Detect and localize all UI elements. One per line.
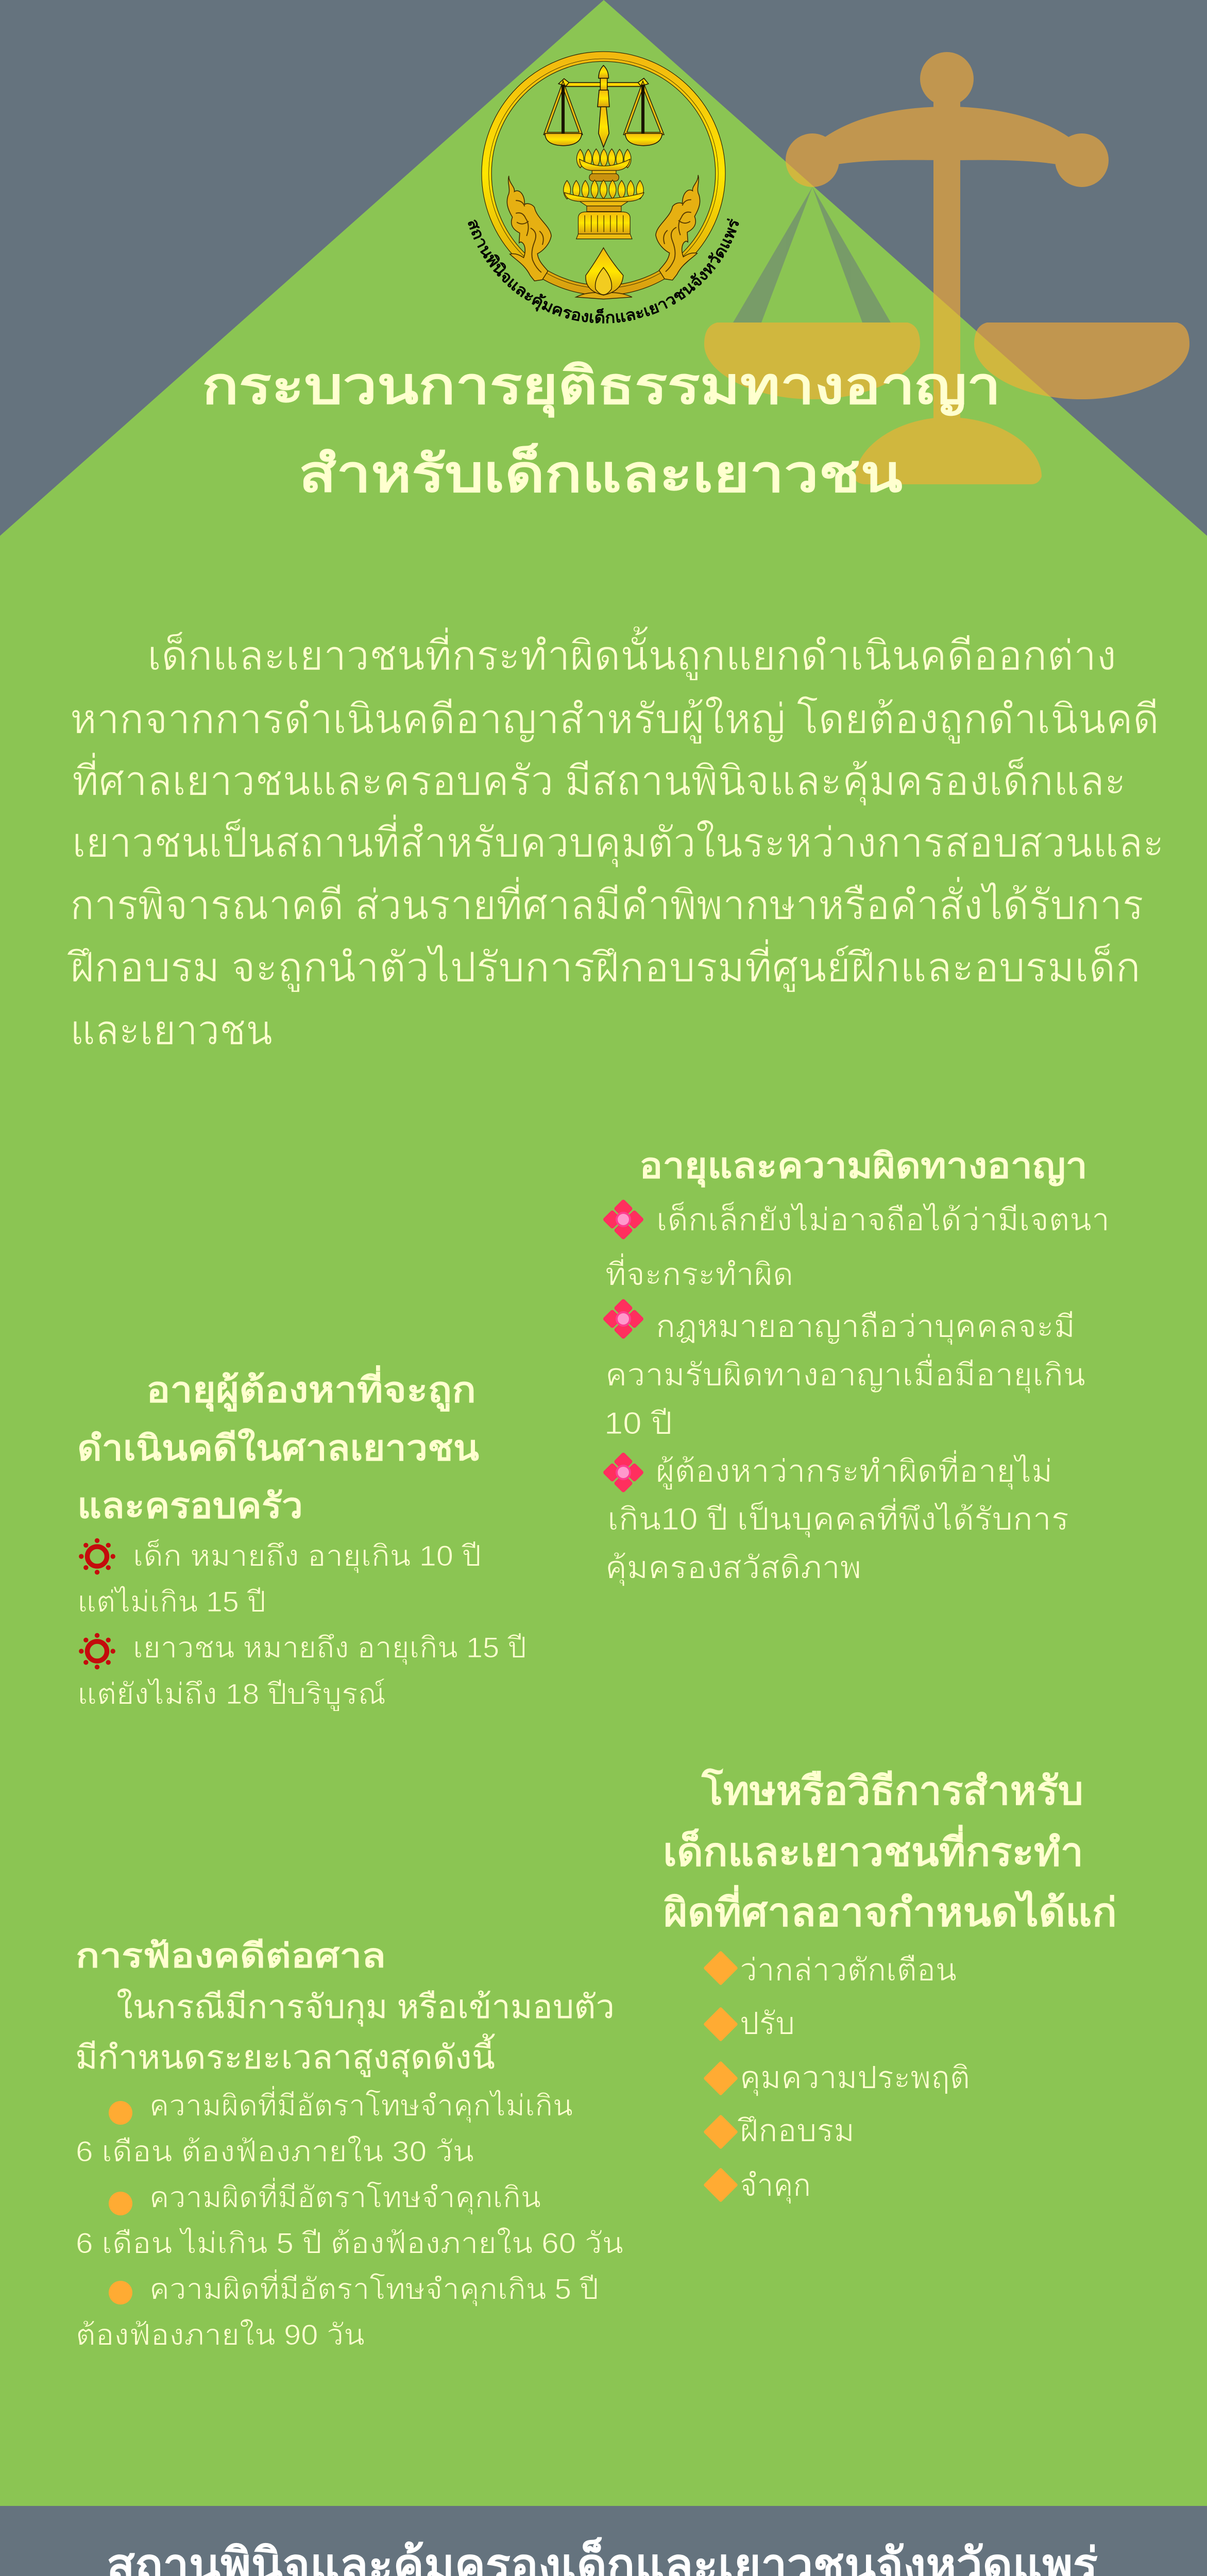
intro text block: ฝึกอบรม จะถูกนำตัวไปรับการฝึกอบรมที่ศูนย์ฝึกและอบรมเด็ก — [67, 939, 1141, 992]
background: top slate band — [0, 0, 1207, 536]
intro text: มีกำหนดระยะเวลาสูงสุดดังนี้ — [75, 2033, 496, 2077]
intro text block: ที่ศาลเยาวชนและครอบครัว มีสถานพินิจและคุ้มครองเด็กและ — [72, 753, 1126, 806]
heading: อายุผู้ต้องหาที่จะถูก — [146, 1365, 476, 1412]
item: youth definition: แต่ยังไม่ถึง 18 ปีบริบูรณ์ — [77, 1677, 386, 1711]
item 2 text — [604, 1309, 1085, 1440]
heading — [77, 1365, 479, 1526]
item: youth definition: เยาวชน หมายถึง อายุเกิน 15 ปี — [133, 1631, 526, 1665]
icon: flower bullet 1 — [602, 1199, 644, 1240]
icon: diamond bullet 1 — [703, 1951, 738, 1986]
icon: diamond bullet 4 — [703, 2114, 738, 2149]
item 1 text — [605, 1201, 1110, 1292]
intro text block: การพิจารณาคดี ส่วนรายที่ศาลมีคำพิพากษาหรือคำสั่งได้รับการ — [70, 877, 1144, 928]
icon: diamond bullet 2 — [703, 2007, 738, 2042]
item 3 text — [605, 1450, 1069, 1586]
icon: orange dot 1 — [109, 2101, 132, 2125]
heading: ดำเนินคดีในศาลเยาวชน — [77, 1428, 479, 1468]
item: fine: ปรับ — [740, 2006, 795, 2041]
seal ring — [482, 52, 725, 295]
heading: การฟ้องคดีต่อศาล — [76, 1937, 386, 1974]
item: probation: คุมความประพฤติ — [740, 2060, 970, 2096]
item: child definition: เด็ก หมายถึง อายุเกิน 10 ปี — [133, 1538, 481, 1573]
item: child definition — [77, 1538, 481, 1618]
item: training: ฝึกอบรม — [738, 2113, 855, 2148]
heading: อายุและความผิดทางอาญา — [639, 1146, 1087, 1188]
lower lotus pedestal — [564, 180, 644, 239]
item 1 text: ที่จะกระทำผิด — [605, 1253, 793, 1292]
title — [202, 357, 1001, 503]
item: 6 months to 5 years — [76, 2177, 623, 2259]
intro text block: เยาวชนเป็นสถานที่สำหรับควบคุมตัวในระหว่างการสอบสวนและ — [72, 815, 1164, 868]
scale body — [704, 52, 1189, 484]
item: over 5 years: ต้องฟ้องภายใน 90 วัน — [76, 2318, 365, 2351]
item 3 text: คุ้มครองสวัสดิภาพ — [605, 1550, 861, 1586]
heading: โทษหรือวิธีการสำหรับ — [701, 1768, 1083, 1813]
item 2 text: ความรับผิดทางอาญาเมื่อมีอายุเกิน — [605, 1353, 1085, 1394]
icon: flower bullet 2 — [602, 1298, 644, 1340]
item 1 text: เด็กเล็กยังไม่อาจถือได้ว่ามีเจตนา — [656, 1201, 1110, 1237]
upper lotus pedestal — [576, 149, 631, 181]
item: up to 6 months: 6 เดือน ต้องฟ้องภายใน 30 วัน — [76, 2135, 474, 2167]
item 3 text: ผู้ต้องหาว่ากระทำผิดที่อายุไม่ — [656, 1450, 1052, 1490]
left naga — [507, 176, 551, 281]
icon: diamond bullet 3 — [703, 2061, 738, 2096]
heading: และครอบครัว — [77, 1486, 303, 1526]
panel: penalties and measures — [663, 1768, 1117, 2204]
balance scale in seal — [545, 65, 662, 147]
panel: age of the accused in juvenile court — [77, 1365, 526, 1711]
icon: flower bullet 3 — [602, 1452, 644, 1493]
icon: sun bullet 1 — [79, 1538, 115, 1574]
icon: orange dot 3 — [109, 2281, 132, 2304]
footer band — [0, 2506, 1207, 2576]
title: กระบวนการยุติธรรมทางอาญา — [202, 357, 1001, 418]
item: over 5 years — [76, 2269, 599, 2351]
item: over 5 years: ความผิดที่มีอัตราโทษจำคุกเกิน 5 ปี — [149, 2269, 599, 2307]
item: 6 months to 5 years: 6 เดือน ไม่เกิน 5 ปี ต้องฟ้องภายใน 60 วัน — [76, 2227, 623, 2259]
scale strings — [733, 187, 891, 323]
item: 6 months to 5 years: ความผิดที่มีอัตราโทษจำคุกเกิน — [149, 2177, 541, 2215]
intro text block — [67, 626, 1164, 1053]
intro text: ในกรณีมีการจับกุม หรือเข้ามอบตัว — [116, 1988, 615, 2027]
lotus bud — [576, 248, 632, 299]
item: up to 6 months: ความผิดที่มีอัตราโทษจำคุกไม่เกิน — [149, 2086, 573, 2123]
icon: department seal logo — [468, 52, 739, 324]
seal curved caption: สถานพินิจและคุ้มครองเด็กและเยาวชนจังหวัดแพร่ — [468, 218, 739, 324]
heading: ผิดที่ศาลอาจกำหนดได้แก่ — [664, 1885, 1117, 1935]
panel: age and criminal liability — [602, 1146, 1110, 1586]
right naga — [656, 175, 700, 280]
intro text block: เด็กและเยาวชนที่กระทำผิดนั้นถูกแยกดำเนินคดีออกต่าง — [147, 626, 1116, 681]
item: child definition: แต่ไม่เกิน 15 ปี — [77, 1585, 266, 1618]
item: imprisonment: จำคุก — [740, 2168, 811, 2204]
background: green triangle roof — [0, 0, 1207, 536]
title: สำหรับเด็กและเยาวชน — [299, 443, 903, 503]
icon: orange dot 2 — [109, 2192, 132, 2215]
intro text — [75, 1988, 615, 2077]
heading: เด็กและเยาวชนที่กระทำ — [663, 1824, 1083, 1874]
intro text block: หากจากการดำเนินคดีอาญาสำหรับผู้ใหญ่ โดยต้องถูกดำเนินคดี — [70, 696, 1159, 744]
item: up to 6 months — [76, 2086, 573, 2167]
icon: translucent scales of justice — [704, 52, 1189, 484]
item 2 text: 10 ปี — [604, 1406, 672, 1440]
intro text block: และเยาวชน — [70, 1007, 273, 1053]
icon: sun bullet 2 — [79, 1633, 115, 1669]
item 3 text: เกิน10 ปี เป็นบุคคลที่พึงได้รับการ — [607, 1498, 1069, 1538]
item 2 text: กฎหมายอาญาถือว่าบุคคลจะมี — [656, 1309, 1075, 1345]
panel: filing charges in court — [75, 1937, 623, 2351]
heading — [663, 1768, 1117, 1935]
item: youth definition — [77, 1631, 526, 1711]
background: green panel — [0, 536, 1207, 2506]
icon: diamond bullet 5 — [703, 2167, 738, 2202]
item: warning: ว่ากล่าวตักเตือน — [740, 1953, 957, 1987]
